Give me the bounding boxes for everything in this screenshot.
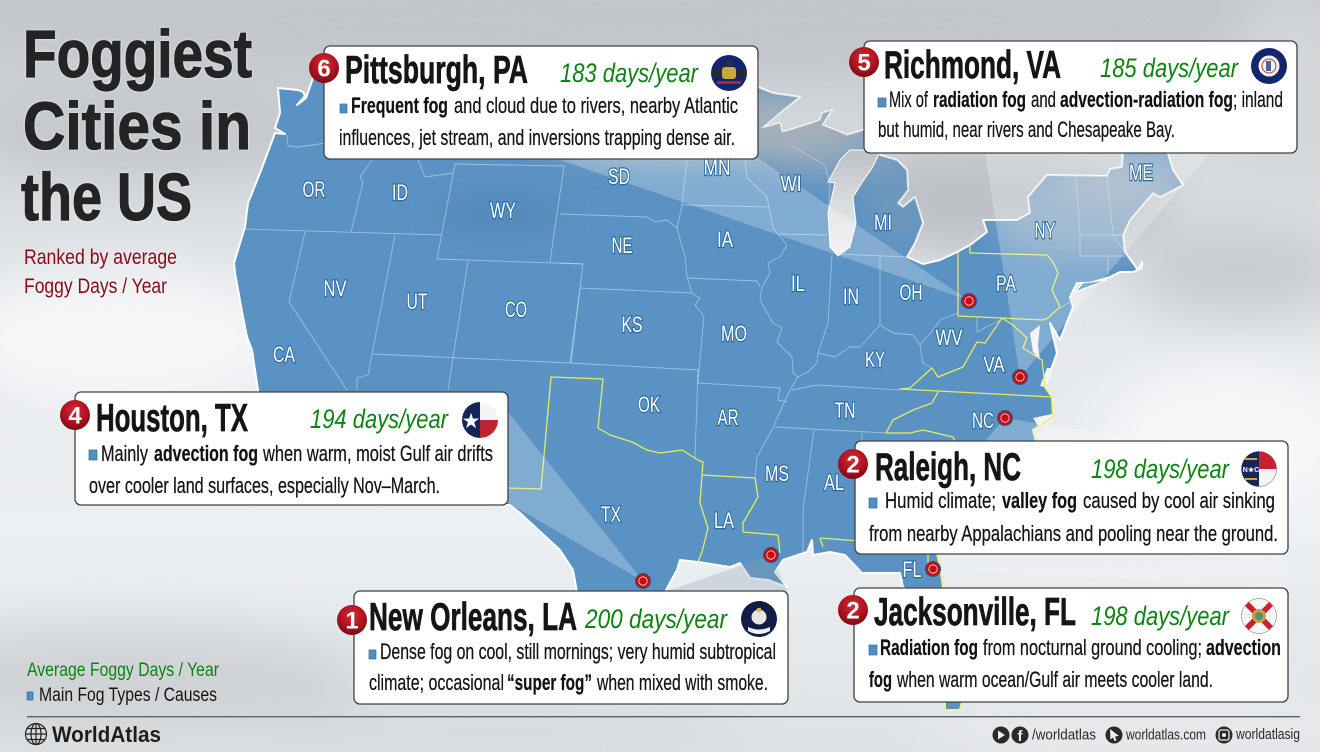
panel: Richmond: but humid, near rivers and Chesapeake Bay. [878,117,1175,142]
title: the US [21,160,192,235]
panel: Richmond [849,41,1297,153]
state labels: OH [900,280,922,305]
state labels: CA [273,342,295,367]
panel: New Orleans [337,591,788,704]
state labels: NE [612,233,632,258]
rank badge 2: 2 [846,452,860,478]
legend: Main Fog Types / Causes [39,685,217,706]
panel: Pittsburgh: 183 days/year [560,58,699,88]
subtitle [24,246,177,298]
state labels: NC [972,408,994,433]
rank badge 2 [838,449,868,479]
state labels: CO [505,297,527,322]
rank badge 1: 1 [345,608,359,634]
panel: Houston [60,392,508,505]
map: contiguous United States [234,60,1190,710]
state labels: MS [765,461,789,486]
social links: worldatlasig [1235,726,1300,743]
rank badge 1 [337,605,367,635]
panel: Houston: when warm, moist Gulf air drifts [262,441,493,466]
legend: Average Foggy Days / Year [27,660,220,681]
flag: Louisiana [741,601,777,637]
panel: Jacksonville: Jacksonville, FL [874,591,1076,634]
state labels: WY [490,198,516,223]
panel: Pittsburgh: Pittsburgh, PA [345,49,528,92]
panel: Jacksonville: Radiation fog [880,635,978,660]
flag: Florida [1242,598,1276,634]
state labels: NY [1034,218,1056,243]
rank badge 6 [309,53,339,83]
state labels: ME [1129,160,1153,185]
state labels: NV [324,276,347,301]
panel: Houston: 194 days/year [310,404,449,434]
panel: Richmond: Richmond, VA [884,44,1061,87]
state labels: ID [392,180,408,205]
state labels: VA [984,352,1005,377]
state labels: WI [780,171,802,196]
highlighted state borders [508,245,1060,710]
state labels: IA [717,227,733,252]
panel: Houston: Mainly [101,441,148,466]
state labels: AL [824,470,844,495]
panel: Raleigh: valley fog [1002,488,1077,513]
panel: New Orleans: when mixed with smoke. [596,670,768,695]
state labels: TX [601,502,621,527]
panel: Jacksonville: advection [1206,635,1281,660]
subtitle: Foggy Days / Year [24,275,167,298]
social links: f [1018,728,1024,745]
footer rule [27,716,1300,717]
state labels: FL [902,557,922,582]
panel: Raleigh: 198 days/year [1091,454,1230,484]
panel: Jacksonville: from nocturnal ground cooling; [983,635,1202,660]
rank badge 5: 5 [857,50,871,76]
state labels: KY [865,347,885,372]
rank badge 2 [838,595,868,625]
panel: New Orleans: New Orleans, LA [369,596,577,639]
light beams linking cities to cards [508,153,1288,592]
panel: Pittsburgh: Frequent fog [351,93,448,118]
state labels: TN [834,398,856,423]
rank badge 4: 4 [68,402,82,430]
state labels: OR [302,177,326,202]
title: Cities in [23,89,251,164]
panel: New Orleans: Dense fog on cool, still mornings; very humid subtropical [380,639,776,664]
panel: Raleigh [838,441,1288,554]
flag: Texas [462,402,498,438]
state labels: MI [874,210,892,235]
rank badge 2: 2 [846,598,860,624]
state labels: WV [936,325,963,350]
panel: Richmond: 185 days/year [1100,53,1239,83]
panel: Houston: advection fog [154,441,258,466]
state labels: MN [704,155,730,180]
logo: WorldAtlas: WorldAtlas [52,722,161,747]
chesapeake bay [1030,325,1052,426]
rank badge 5 [849,47,879,77]
city markers [636,294,1028,588]
state labels: PA [996,271,1016,296]
panel: Richmond: radiation fog [933,87,1026,112]
panel: Houston: over cooler land surfaces, especially Nov–March. [89,473,440,498]
panel: Richmond: Mix of [889,87,929,112]
state labels [273,155,1153,582]
flag: Virginia [1251,48,1287,84]
panel: Richmond: ; inland [1233,87,1283,112]
state labels: IN [843,284,859,309]
panel: Pittsburgh [309,46,758,159]
state labels: AR [718,405,738,430]
state labels: KS [622,312,642,337]
panel: Raleigh: Raleigh, NC [875,446,1021,489]
panel: Jacksonville: fog [869,667,892,692]
social links: /worldatlas [1032,726,1096,744]
state labels: LA [714,508,734,533]
legend [27,660,220,706]
state labels: SD [608,164,630,189]
title [21,17,252,235]
social links: worldatlas.com [1125,726,1206,744]
title: Foggiest [23,17,252,92]
panel: New Orleans: 200 days/year [584,604,728,634]
panel: Pittsburgh: and cloud due to rivers, nearby Atlantic [454,93,738,118]
subtitle: Ranked by average [24,246,177,269]
flag: North Carolina [1242,452,1276,486]
flag: Texas: ★ [462,410,480,433]
panel: Jacksonville: 198 days/year [1091,601,1230,631]
panel: New Orleans: “super fog” [507,670,592,695]
state labels: MO [721,321,747,346]
panel: Houston: Houston, TX [96,397,248,440]
state labels: OK [638,392,660,417]
flag: Pennsylvania [711,55,747,91]
panel: Pittsburgh: influences, jet stream, and inversions trapping dense air. [339,125,735,150]
state labels: UT [406,289,428,314]
state borders [245,135,1125,552]
panel: New Orleans: climate; occasional [369,670,504,695]
social links [992,726,1300,745]
panel: Richmond: and [1031,87,1056,112]
panel: Jacksonville [838,588,1288,702]
lake michigan [828,150,880,256]
rank badge 4 [60,400,90,430]
flag: North Carolina: N★C [1243,466,1259,474]
panel: Richmond: advection-radiation fog [1060,87,1233,112]
state labels: IL [791,271,805,296]
panel: Raleigh: Humid climate; [885,488,996,513]
rank badge 6: 6 [317,56,331,82]
